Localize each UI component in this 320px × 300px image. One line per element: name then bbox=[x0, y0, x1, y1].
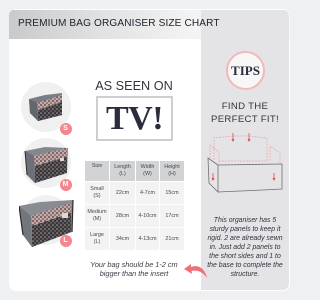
badge: TV bbox=[96, 96, 173, 141]
row large: (L) bbox=[94, 239, 100, 245]
row medium bbox=[85, 205, 184, 227]
heading: find the perfect fit bbox=[211, 101, 279, 125]
diagram: panels bbox=[208, 133, 282, 193]
note: bag size bbox=[90, 260, 178, 278]
row medium: 17cm bbox=[165, 213, 179, 219]
text: tips description bbox=[207, 216, 283, 278]
row small: 15cm bbox=[165, 190, 179, 196]
panel: tips bbox=[201, 10, 289, 290]
text: tips description: sturdy panels to keep it bbox=[210, 226, 280, 233]
row small: 4-7cm bbox=[140, 190, 155, 196]
header row: Length bbox=[114, 164, 131, 170]
size badge L bbox=[60, 235, 72, 247]
text: tips description: rigid. 2 are already sewn bbox=[207, 235, 283, 242]
size badge M: M bbox=[63, 181, 68, 188]
title: PREMIUM BAG ORGANISER SIZE CHART bbox=[18, 18, 220, 29]
circle bbox=[21, 82, 71, 132]
size badge S: S bbox=[63, 125, 68, 132]
size badge M bbox=[60, 179, 72, 191]
arrow: note bbox=[184, 264, 207, 278]
text: tips description: the base to complete the bbox=[207, 262, 283, 269]
row small: (S) bbox=[93, 193, 101, 199]
circle bbox=[21, 138, 71, 188]
row small: Small bbox=[90, 186, 104, 192]
header row: Height bbox=[164, 164, 180, 170]
size badge L: L bbox=[63, 237, 68, 244]
note: bag size: bigger than the insert bbox=[100, 269, 168, 278]
text: tips description: in. Just add 2 panels to bbox=[210, 244, 280, 251]
header row: Size bbox=[92, 163, 102, 169]
badge: TV: TV! bbox=[106, 100, 163, 137]
row large: 34cm bbox=[116, 236, 129, 242]
header row bbox=[85, 161, 184, 181]
header band bbox=[9, 10, 290, 39]
heading: find the perfect fit: PERFECT FIT! bbox=[211, 114, 279, 125]
header row: (W) bbox=[143, 171, 152, 177]
size badge S bbox=[60, 123, 72, 135]
row large bbox=[85, 228, 184, 250]
text: tips description: structure. bbox=[231, 271, 259, 278]
product: large bbox=[19, 195, 74, 247]
icon: tips bbox=[226, 51, 265, 90]
note: bag size: Your bag should be 1-2 cm bbox=[90, 260, 178, 269]
bag bbox=[24, 147, 68, 183]
row medium: 28cm bbox=[116, 213, 129, 219]
product: medium bbox=[21, 138, 72, 191]
icon: tips: TIPS bbox=[231, 63, 260, 78]
row medium: (M) bbox=[93, 216, 101, 222]
size table bbox=[85, 161, 184, 250]
header row: Width bbox=[141, 164, 154, 170]
bag bbox=[19, 200, 74, 247]
box bbox=[208, 158, 282, 192]
arrows bbox=[212, 133, 276, 181]
text: tips description: the short sides and 1 to bbox=[209, 253, 281, 260]
text: tips description: This organiser has 5 bbox=[214, 216, 276, 224]
row medium: 4-10cm bbox=[138, 213, 156, 219]
heading: find the perfect fit: FIND THE bbox=[222, 101, 268, 112]
header row: (H) bbox=[168, 171, 176, 177]
bag bbox=[29, 93, 62, 121]
row small bbox=[85, 182, 184, 204]
row small: 22cm bbox=[116, 190, 129, 196]
product: small bbox=[21, 82, 72, 135]
header row: (L) bbox=[119, 171, 126, 177]
row large: 4-13cm bbox=[138, 236, 156, 242]
row large: Large bbox=[90, 232, 104, 238]
heading: as seen on: AS SEEN ON bbox=[95, 79, 173, 93]
row large: 21cm bbox=[165, 236, 179, 242]
circle bbox=[21, 195, 71, 245]
row medium: Medium bbox=[87, 209, 107, 215]
